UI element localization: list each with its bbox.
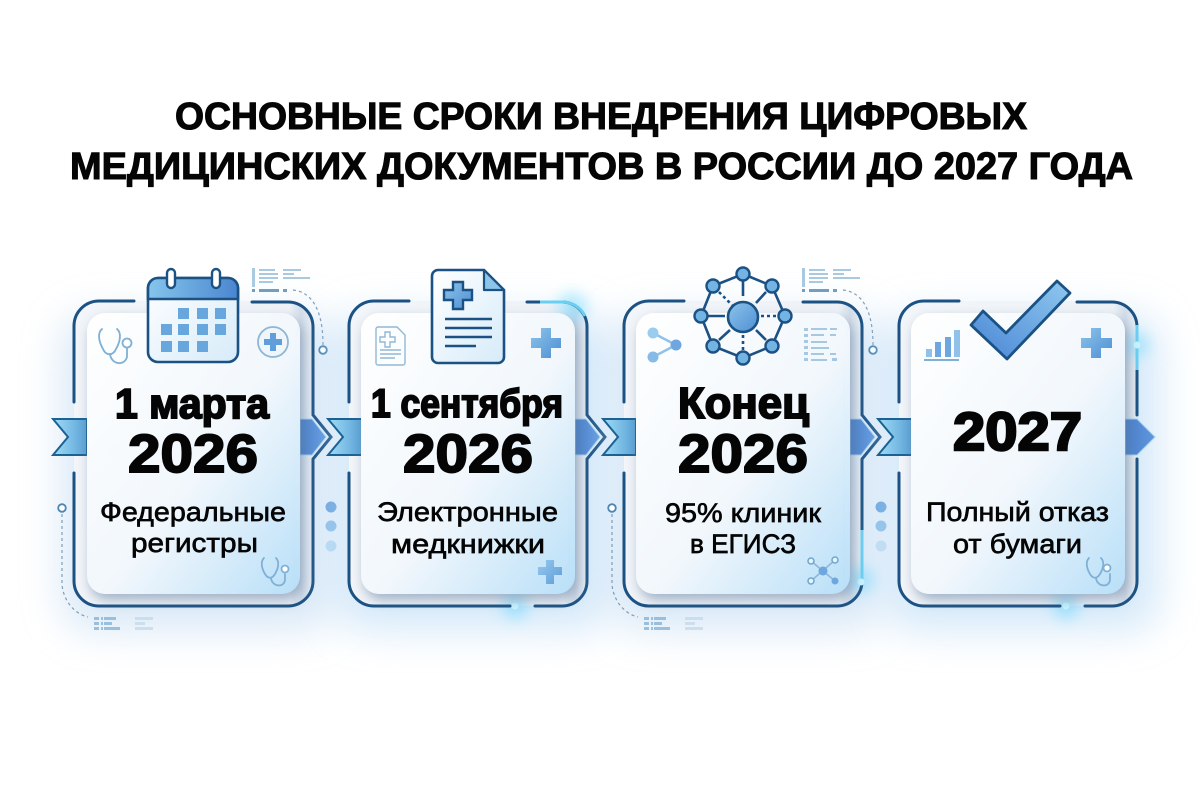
label: Полный отказ от бумаги: [926, 497, 1109, 559]
title: [70, 96, 1133, 188]
label: 95% клиник в ЕГИСЗ: в ЕГИСЗ: [690, 529, 796, 559]
icon: plus in circle: [258, 327, 288, 357]
right arrow: [1125, 419, 1155, 455]
date: 1 марта 2026: [115, 380, 270, 484]
label: Полный отказ от бумаги: Полный отказ: [926, 497, 1109, 527]
date: 1 сентября 2026: 2026: [403, 424, 533, 484]
icon: calendar: [148, 269, 238, 362]
card frame: [899, 301, 1137, 606]
card frame: [349, 301, 605, 606]
decoration: dots after card 3: [876, 502, 886, 552]
label: Полный отказ от бумаги: от бумаги: [953, 529, 1082, 559]
card frame: [624, 301, 880, 606]
left ribbon: [53, 419, 87, 455]
icon: document with cross: [432, 270, 504, 363]
card surface: [87, 313, 300, 594]
card frame: [74, 301, 331, 606]
panel: 2027: [878, 281, 1159, 630]
decoration: connector bottom left card 1: [58, 504, 153, 630]
label: Федеральные регистры: регистры: [131, 528, 258, 558]
label: 95% клиник в ЕГИСЗ: [665, 498, 821, 559]
label: 95% клиник в ЕГИСЗ: 95% клиник: [665, 498, 821, 528]
date: Конец 2026: [678, 379, 809, 484]
card surface: [911, 313, 1125, 594]
left ribbon: [878, 419, 912, 455]
icon: small network: [808, 557, 838, 584]
decoration: connector top right card 3: [802, 268, 877, 354]
icon: plus small: [538, 560, 562, 584]
date: 1 сентября 2026: [371, 382, 563, 484]
card surface: [636, 313, 850, 594]
icon: bar chart: [924, 330, 960, 361]
right arrow: [850, 419, 875, 455]
decoration: connector top right card 1: [252, 268, 327, 354]
title: МЕДИЦИНСКИХ ДОКУМЕНТОВ В РОССИИ ДО 2027 ГОДА: [70, 146, 1133, 188]
icon: small document: [376, 327, 405, 365]
right arrow: [300, 419, 326, 455]
icon: stethoscope: [99, 329, 132, 363]
panel: Конец 2026: [603, 268, 884, 630]
left ribbon: [328, 419, 362, 455]
panel: 1 марта 2026: [53, 269, 334, 630]
icon: stethoscope small: [262, 558, 288, 585]
icon: data list: [804, 328, 837, 361]
label: Федеральные регистры: Федеральные: [100, 497, 286, 527]
icon: share: [648, 328, 682, 362]
icon: plus: [1081, 328, 1112, 358]
label: Электронные медкнижки: медкнижки: [391, 529, 545, 559]
icon: plus: [531, 328, 561, 358]
date: Конец 2026: Конец: [678, 379, 809, 428]
card surface: [361, 313, 575, 594]
icon: network: [694, 268, 792, 364]
date: 1 марта 2026: 1 марта: [115, 380, 270, 427]
label: Федеральные регистры: [100, 497, 286, 558]
decoration: dots after card 1: [326, 502, 336, 552]
decoration: connector bottom left card 3: [608, 504, 703, 630]
right arrow: [575, 419, 600, 455]
icon: checkmark: [971, 281, 1070, 359]
label: Электронные медкнижки: Электронные: [377, 497, 558, 527]
label: Электронные медкнижки: [377, 497, 558, 559]
date: Конец 2026: 2026: [678, 424, 808, 484]
title: ОСНОВНЫЕ СРОКИ ВНЕДРЕНИЯ ЦИФРОВЫХ: [175, 96, 1028, 138]
panel: 1 сентября 2026: [328, 270, 609, 630]
date: 1 марта 2026: 2026: [128, 424, 258, 484]
date: 1 сентября 2026: 1 сентября: [371, 382, 563, 426]
icon: stethoscope small: [1087, 558, 1110, 585]
date: 2027: 2027: [953, 402, 1082, 462]
left ribbon: [603, 419, 636, 455]
